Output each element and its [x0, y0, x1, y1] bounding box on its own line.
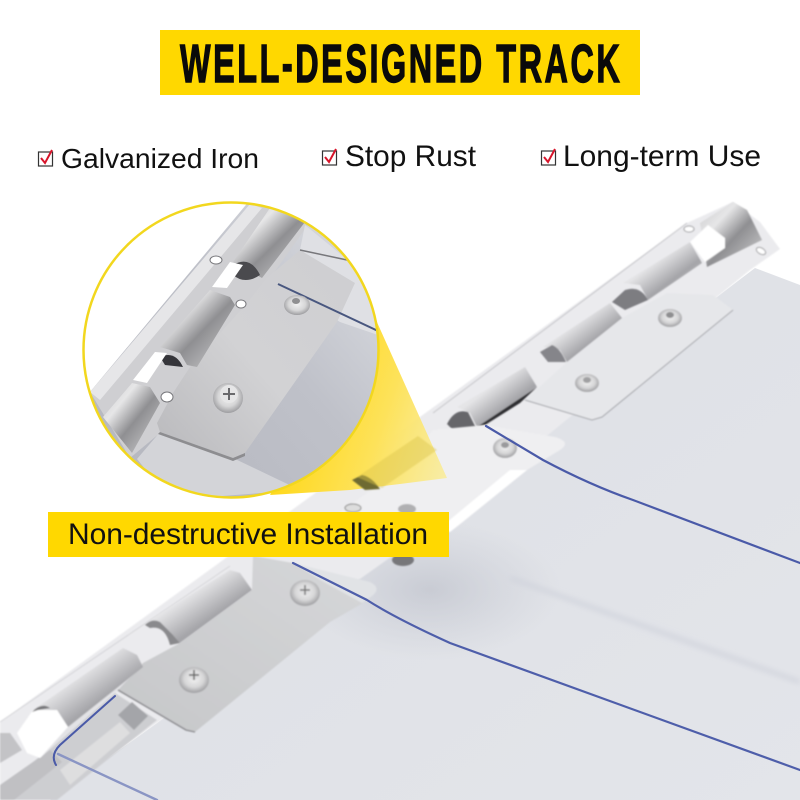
zoom cone	[270, 320, 447, 495]
top plate screw 1	[658, 309, 682, 327]
photo: metal track rail	[0, 202, 780, 800]
cone: highlighted clip inside	[352, 436, 437, 490]
lens: clear flap	[300, 225, 376, 334]
photo: PVC strip blue edges	[54, 426, 800, 800]
photo: middle plate with clear flap	[300, 425, 565, 566]
lens: screw large	[213, 383, 243, 413]
feature: Stop Rust: Stop Rust	[345, 140, 477, 173]
top plate screw 2	[575, 374, 599, 392]
lens: tube middle	[160, 290, 235, 367]
lens: tube lower	[103, 383, 160, 453]
photo: lower track tubes	[0, 570, 252, 763]
lower plate screw 1	[290, 580, 320, 606]
check icon	[38, 150, 52, 166]
photo: top track tubes	[440, 202, 767, 449]
lower plate screw 2	[179, 667, 209, 693]
lens: tube top	[233, 208, 305, 278]
title banner: WELL-DESIGNED TRACK	[180, 35, 620, 94]
lens: blue edge	[278, 284, 378, 331]
photo: lower mounting plate	[118, 556, 377, 732]
photo: top mounting plate	[525, 293, 733, 420]
lens: holes	[210, 256, 222, 264]
magnifier circle	[80, 200, 390, 500]
check icon	[542, 149, 556, 165]
lens: plate	[157, 250, 355, 458]
middle plate screw	[493, 438, 517, 458]
lens: track rail	[91, 239, 268, 457]
feature: Galvanized Iron: Galvanized Iron	[61, 143, 259, 174]
photo: PVC curtain sheet	[50, 268, 800, 800]
check icon	[322, 149, 336, 165]
callout: Non-destructive Installation: Non-destructive Installation	[68, 518, 428, 551]
callout: Non-destructive Installation	[48, 512, 449, 557]
lens: screw small	[284, 295, 310, 315]
feature: Long-term Use: Long-term Use	[563, 140, 761, 173]
